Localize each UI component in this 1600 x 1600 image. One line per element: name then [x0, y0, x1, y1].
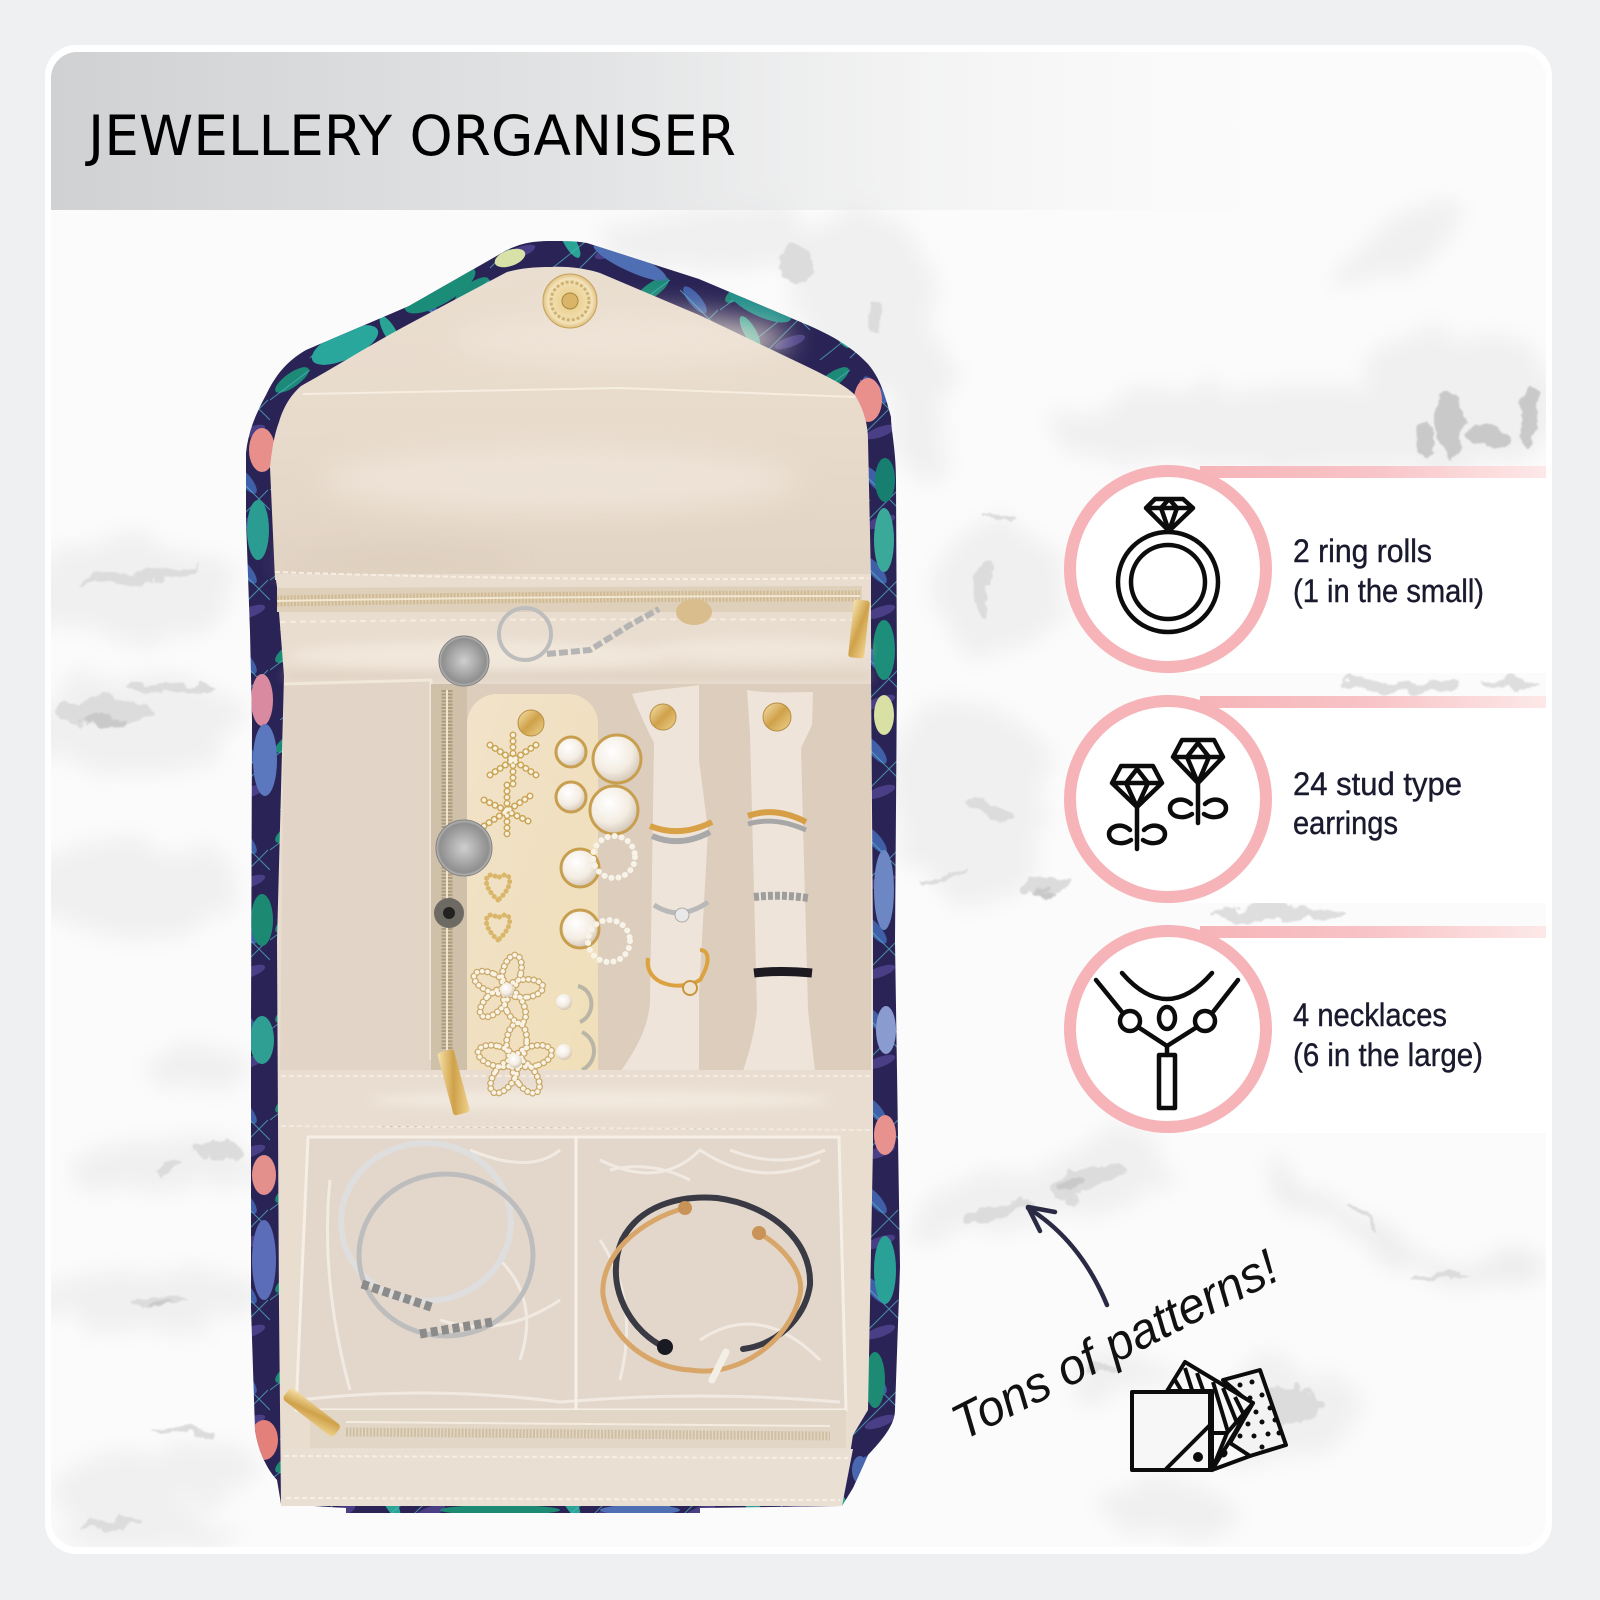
flap stitch — [303, 388, 855, 397]
crystal c-hoop earrings — [556, 986, 594, 1070]
arrow pointing to bag — [1028, 1207, 1107, 1305]
left pocket — [280, 680, 431, 1070]
marble in row gaps — [1210, 679, 1540, 920]
clear vinyl pouch — [296, 1137, 846, 1420]
necklaces text — [1293, 997, 1483, 1073]
rings on right roll — [748, 812, 812, 973]
icon: necklaces — [1096, 973, 1238, 1108]
rings on left roll — [648, 822, 712, 995]
feature row: ring rolls — [1070, 466, 1546, 673]
chain with coin charm — [439, 599, 712, 686]
feature row: necklaces — [1070, 926, 1546, 1133]
flap seam stitch — [275, 572, 868, 579]
card snap — [518, 710, 544, 736]
dotted swatch — [1223, 1370, 1286, 1456]
pearl flower earrings — [471, 953, 554, 1098]
feature row: earrings — [1070, 696, 1546, 903]
plain swatch — [1132, 1392, 1210, 1470]
row background — [1168, 478, 1546, 673]
patterned fabric shell — [230, 230, 910, 1530]
earring card — [467, 694, 641, 1072]
necklaces text: (6 in the large) — [1293, 1037, 1483, 1073]
ring rolls text: (1 in the small) — [1293, 573, 1484, 609]
ring roll right — [743, 690, 815, 1071]
heart earrings — [486, 875, 510, 940]
earrings text: 24 stud type — [1293, 766, 1462, 802]
lower band — [279, 1070, 873, 1133]
ring rolls text — [1293, 533, 1484, 609]
row background — [1168, 708, 1546, 903]
earrings text: earrings — [1293, 805, 1398, 841]
circle badge — [1070, 931, 1266, 1127]
beige flap lining — [270, 267, 871, 580]
pink top bar — [1200, 696, 1546, 708]
icon: stud earrings — [1109, 740, 1226, 849]
title text: JEWELLERY ORGANISER — [85, 104, 736, 168]
bottom zipper — [282, 1387, 846, 1448]
bottom band — [281, 1449, 853, 1506]
flap sheen — [280, 312, 800, 574]
gold and black bangles — [603, 1197, 810, 1380]
jewellery organiser product — [230, 230, 910, 1530]
top zipper — [277, 586, 862, 622]
ring roll left — [621, 685, 712, 1071]
compartment backing — [431, 684, 871, 1070]
marble panel — [51, 199, 1546, 1547]
icon: ring — [1118, 499, 1218, 632]
earrings text — [1293, 766, 1462, 841]
icon: fabric swatches — [1132, 1362, 1286, 1470]
zipper charms — [434, 820, 492, 928]
row background — [1168, 938, 1546, 1133]
gold zipper pull on pocket — [437, 1049, 470, 1116]
vertical zipper — [431, 684, 467, 1074]
magnetic snap — [543, 274, 597, 328]
main lining — [275, 574, 873, 1506]
pearl hoops — [588, 836, 635, 962]
necklaces text: 4 necklaces — [1293, 997, 1447, 1033]
pink top bar — [1200, 466, 1546, 478]
snowflake earrings — [484, 735, 536, 838]
handwritten note: Tons of patterns! — [943, 1238, 1287, 1451]
silver bangles — [341, 1143, 533, 1336]
circle badge — [1070, 471, 1266, 667]
striped swatch — [1167, 1362, 1253, 1433]
ring rolls text: 2 ring rolls — [1293, 533, 1432, 569]
circle badge — [1070, 701, 1266, 897]
upper band sheen — [284, 638, 871, 676]
top zipper gold pull — [848, 599, 870, 659]
small pearl studs — [556, 735, 641, 948]
title bar — [51, 52, 1290, 210]
pink top bar — [1200, 926, 1546, 938]
lower folded triangle — [1212, 1403, 1253, 1470]
